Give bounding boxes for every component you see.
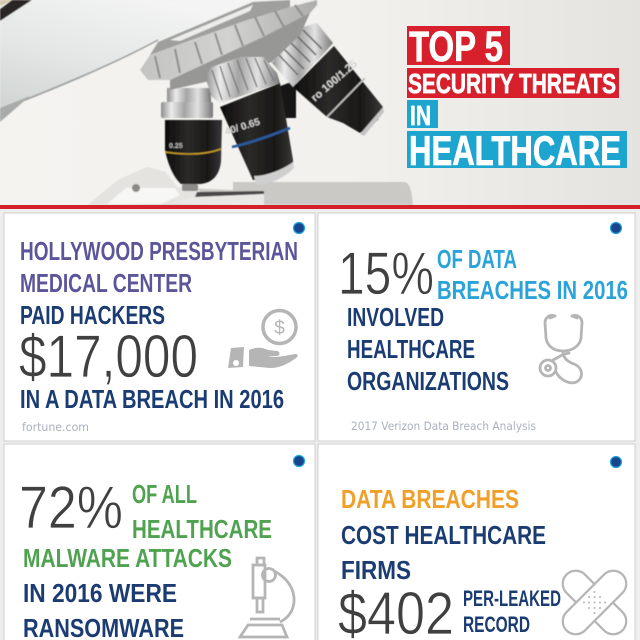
bullet dot xyxy=(610,456,622,468)
heading xyxy=(437,244,628,305)
panel: data breaches cost xyxy=(318,444,635,640)
red divider xyxy=(0,205,640,209)
figure: 15%: 15% xyxy=(338,240,434,307)
title line: in: IN xyxy=(410,100,431,131)
source: 2017 Verizon Data Breach Analysis xyxy=(351,419,536,433)
turret xyxy=(140,0,317,90)
objective: center xyxy=(205,57,294,184)
objective label: 0.25 xyxy=(169,143,183,150)
icon: hand with coin: $ xyxy=(274,318,285,339)
text: involved healthcare organizations: INVOLVED xyxy=(347,302,444,332)
text: in 2016 were ransomware: IN 2016 WERE xyxy=(23,578,177,608)
heading: DATA BREACHES xyxy=(341,484,519,514)
heading: MEDICAL CENTER xyxy=(20,268,192,298)
text: per-leaked record: RECORD xyxy=(463,612,530,637)
heading xyxy=(20,236,298,298)
text: paid hackers: PAID HACKERS xyxy=(20,300,165,330)
objective label: 40/ 0.65 xyxy=(224,117,262,138)
text: in a data breach: IN A DATA BREACH IN 2016 xyxy=(20,384,284,414)
title line: top 5: TOP 5 xyxy=(409,23,503,71)
figure: 72%: 72% xyxy=(19,474,123,541)
bullet dot xyxy=(610,222,622,234)
heading xyxy=(23,479,272,573)
microscope body xyxy=(0,0,255,110)
heading: MALWARE ATTACKS xyxy=(23,543,232,573)
source: fortune.com xyxy=(22,420,89,434)
text: per-leaked record: PER-LEAKED xyxy=(463,586,561,611)
text: per-leaked record xyxy=(463,586,561,637)
text: cost healthcare firms: FIRMS xyxy=(341,555,411,585)
text: involved healthcare organizations: ORGANIZATIONS xyxy=(347,366,509,396)
panel: 15 percent xyxy=(318,213,635,441)
title xyxy=(407,23,627,174)
icon: stethoscope xyxy=(540,315,582,383)
heading: OF DATA xyxy=(437,244,517,274)
stage of microscope xyxy=(88,167,413,205)
heading: HOLLYWOOD PRESBYTERIAN xyxy=(20,236,298,266)
microscope photo xyxy=(0,0,413,205)
objective: left xyxy=(161,88,222,191)
bullet dot xyxy=(294,222,304,234)
heading: HEALTHCARE xyxy=(132,514,272,544)
icon: microscope xyxy=(240,558,294,637)
bullet dot xyxy=(294,456,304,466)
text: cost healthcare firms xyxy=(341,520,546,585)
figure: $17,000: $17,000 xyxy=(19,323,198,390)
text: in 2016 were ransomware xyxy=(23,578,184,640)
panel: Hollywood Presbyterian xyxy=(4,213,315,441)
objective: right xyxy=(272,23,384,136)
text: involved healthcare organizations: HEALTHCARE xyxy=(347,334,475,364)
text: cost healthcare firms: COST HEALTHCARE xyxy=(341,520,546,550)
icon: hand with coin xyxy=(228,310,298,368)
panel: header photo xyxy=(0,0,640,205)
objective label: ro 100/1.25 xyxy=(309,58,360,104)
heading: OF ALL xyxy=(132,479,197,509)
panel: 72 percent xyxy=(4,444,315,640)
icon: crossed bandages xyxy=(557,565,632,640)
text: involved healthcare organizations xyxy=(347,302,509,396)
